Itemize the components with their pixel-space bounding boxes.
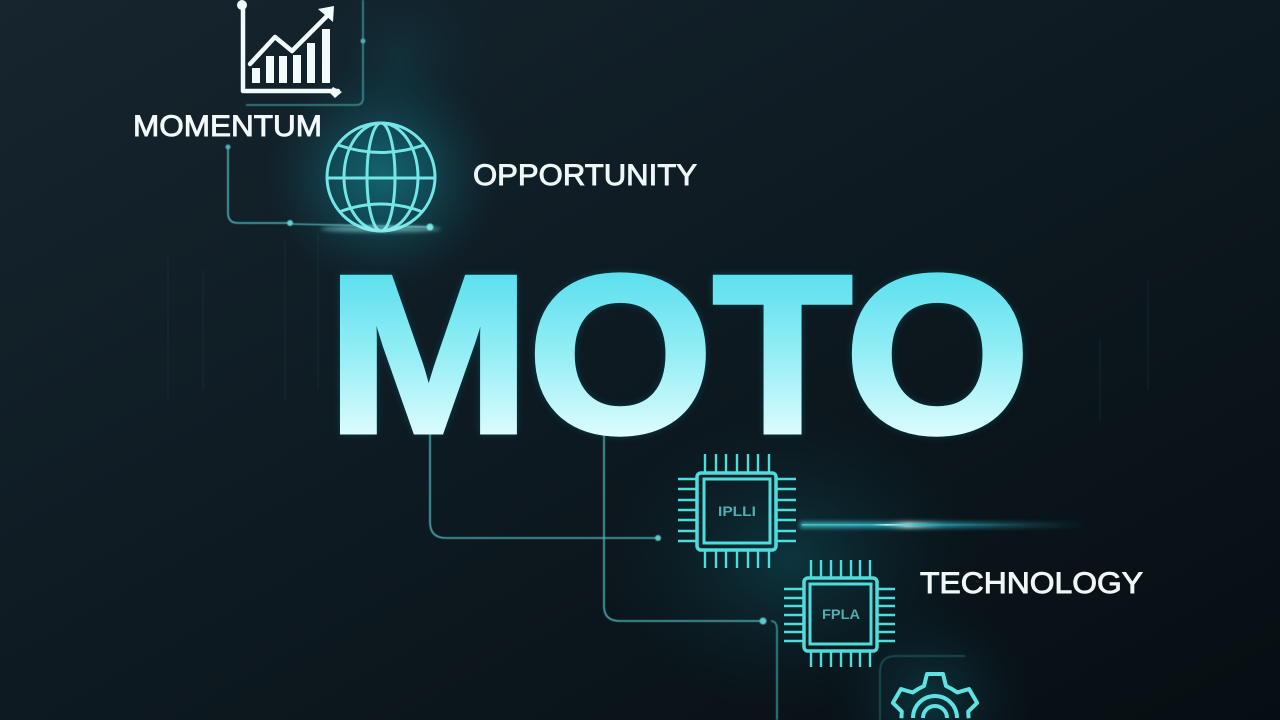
light streak (800, 522, 1090, 528)
title: MOTO: M (326, 228, 531, 480)
title: MOTO: O (845, 229, 1030, 481)
title: MOTO: O (845, 229, 1030, 481)
icon: processor chip one (678, 454, 796, 568)
label: technology: TECHNOLOGY (920, 567, 1143, 600)
icon: processor chip two (784, 560, 895, 667)
label: momentum: MOMENTUM (133, 110, 322, 143)
title: MOTO: T (713, 230, 852, 481)
chip two lettering: FPLA (822, 606, 860, 622)
title: MOTO: O (528, 229, 713, 481)
title: MOTO: T (713, 230, 852, 481)
title: MOTO (326, 228, 1030, 481)
title: MOTO: M (326, 228, 531, 480)
icon: gear (888, 674, 982, 718)
connector lines (226, 0, 965, 720)
icon: globe (321, 123, 441, 232)
chip one lettering: IPLLI (718, 503, 756, 519)
title: MOTO: O (528, 229, 713, 481)
icon: growth chart (237, 0, 342, 98)
label: opportunity: OPPORTUNITY (473, 159, 697, 192)
